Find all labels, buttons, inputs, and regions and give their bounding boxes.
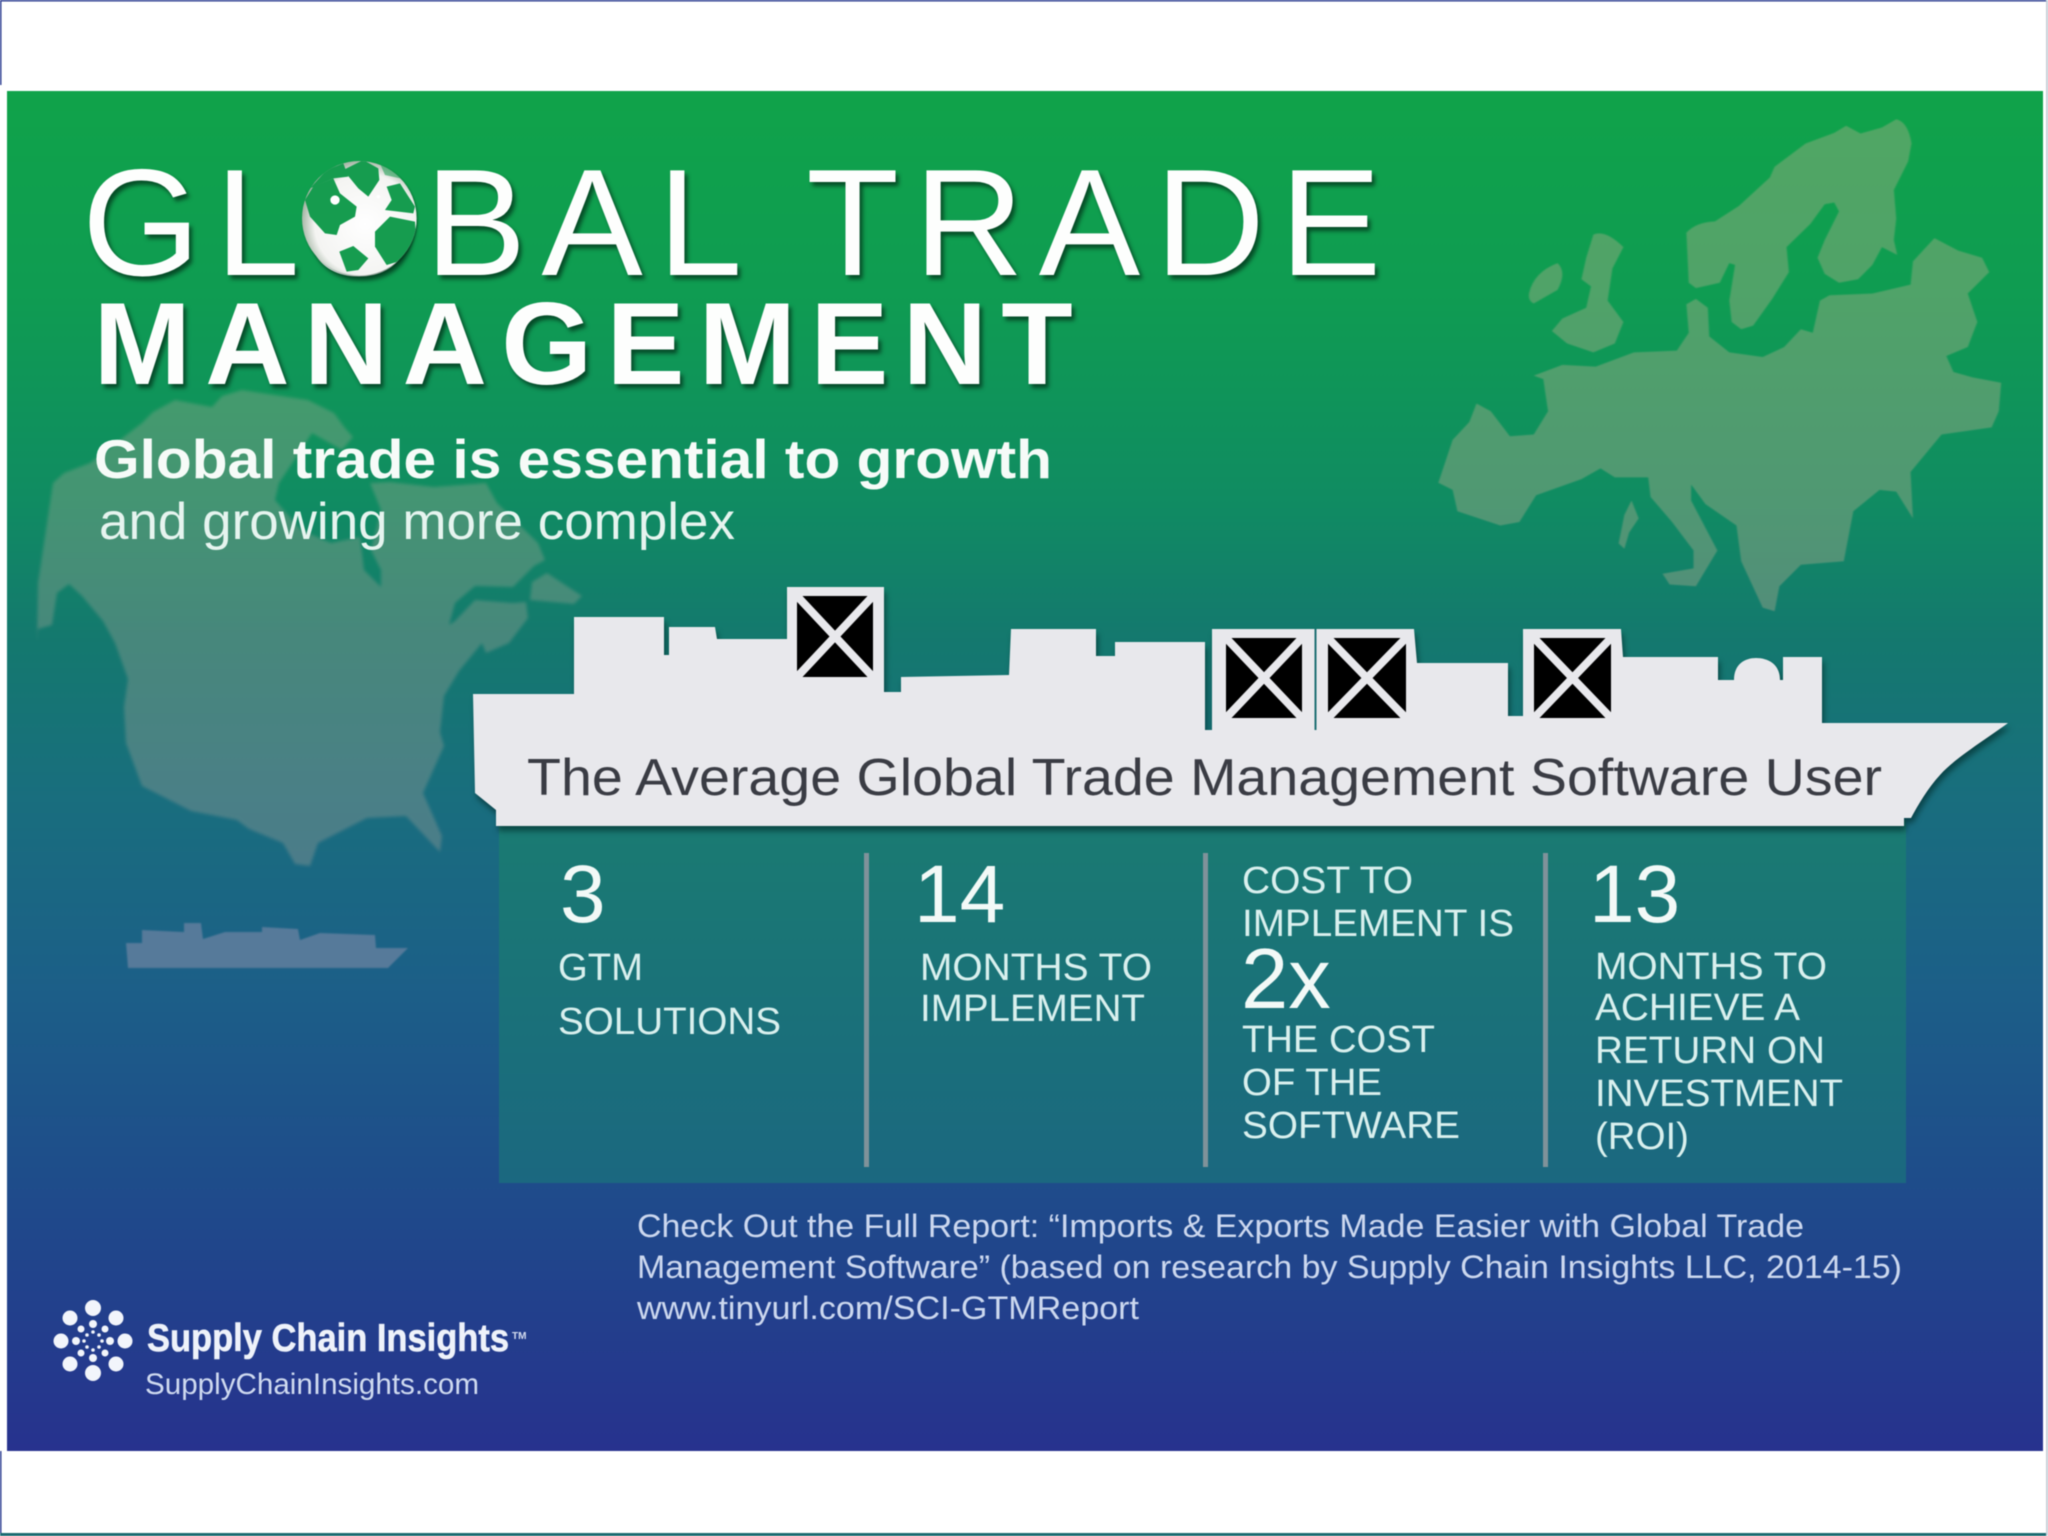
stat: 14 months to implement: 14	[914, 849, 1005, 940]
map: North America	[37, 390, 582, 866]
stat: 13 months to ROI: ACHIEVE A	[1595, 987, 1801, 1029]
ship heading: The Average Global Trade Management Software User	[527, 749, 1882, 807]
stat: cost 2x: THE COST	[1242, 1019, 1435, 1061]
stat: 13 months to ROI: (ROI)	[1595, 1116, 1689, 1158]
logo url: SupplyChainInsights.com	[145, 1368, 479, 1401]
report citation: Management Software” (based on research by Supply Chain Insights LLC, 2014-15)	[637, 1249, 1902, 1285]
title: Management: MANAGEMENT	[94, 278, 1087, 409]
title: Global Trade: O	[300, 138, 433, 308]
title: Global Trade: BAL TRADE	[425, 138, 1396, 308]
subtitle	[94, 428, 1052, 551]
stat: 13 months to ROI: MONTHS TO	[1595, 946, 1827, 988]
stat: cost 2x: 2x	[1241, 932, 1331, 1027]
subtitle: and growing more complex	[99, 493, 735, 551]
stat: 3 GTM solutions: GTM	[558, 947, 643, 989]
logo wordmark: Supply Chain Insights	[147, 1317, 509, 1360]
icon: globe	[302, 160, 417, 276]
dividers	[864, 853, 1548, 1167]
container 2	[1215, 629, 1314, 722]
subtitle: Global trade is essential to growth	[94, 428, 1052, 490]
logo: Supply Chain Insights	[54, 1300, 526, 1401]
stat: 14 months to implement: MONTHS TO	[920, 947, 1152, 989]
container 3	[1316, 629, 1414, 722]
stat: cost 2x: OF THE	[1242, 1062, 1382, 1104]
stat: 3 GTM solutions: 3	[560, 849, 606, 940]
stat: 3 GTM solutions	[558, 849, 781, 1043]
stat: 13 months to ROI: RETURN ON	[1595, 1030, 1825, 1072]
stat: 3 GTM solutions: SOLUTIONS	[558, 1001, 781, 1043]
stat: 14 months to implement	[914, 849, 1152, 1030]
icon: sunburst	[54, 1300, 132, 1381]
stat: 13 months to ROI: INVESTMENT	[1595, 1073, 1843, 1115]
logo: Supply Chain Insights: TM	[512, 1331, 526, 1342]
map: Europe	[1438, 119, 2001, 611]
stat: 14 months to implement: IMPLEMENT	[920, 988, 1145, 1030]
report citation: www.tinyurl.com/SCI-GTMReport	[636, 1290, 1139, 1326]
ship	[473, 587, 2008, 826]
icon: small distant ship	[126, 923, 408, 968]
panel: statistics	[499, 820, 1906, 1183]
stat: 13 months to ROI	[1589, 849, 1843, 1158]
stat: 13 months to ROI: 13	[1589, 849, 1680, 940]
title: Global Trade: GL	[82, 138, 315, 308]
stat: cost 2x	[1241, 860, 1514, 1147]
container 1	[787, 587, 884, 680]
report citation	[636, 1208, 1902, 1326]
ship hull and superstructure	[473, 587, 2008, 826]
report citation: Check Out the Full Report: “Imports & Exports Made Easier with Global Trade	[637, 1208, 1804, 1244]
stat: cost 2x: SOFTWARE	[1242, 1105, 1460, 1147]
stat: cost 2x: IMPLEMENT IS	[1242, 903, 1514, 945]
stat: cost 2x: COST TO	[1242, 860, 1413, 902]
container 4	[1523, 629, 1621, 720]
